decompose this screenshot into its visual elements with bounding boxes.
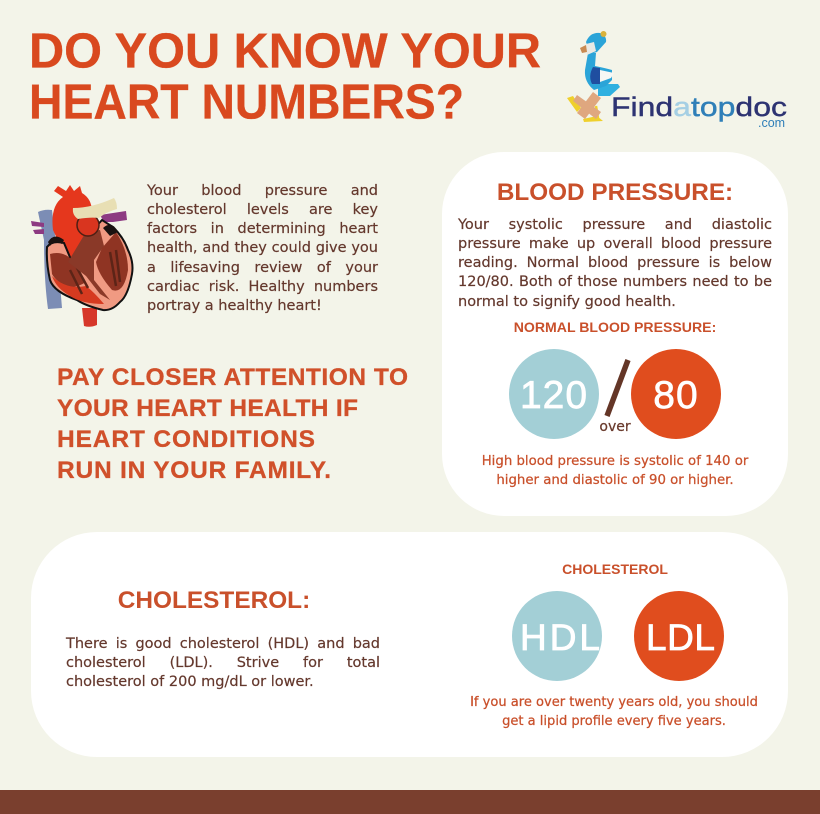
callout: family history	[57, 364, 408, 484]
intro text: factors in determining heart	[147, 221, 378, 237]
intro text: cardiac risk. Healthy numbers	[147, 279, 378, 295]
chart: HDL and LDL	[512, 591, 724, 681]
cholesterol text: cholesterol of 200 mg/dL or lower.	[66, 674, 314, 690]
title	[29, 24, 541, 130]
blood pressure text: reading. Normal blood pressure is below	[458, 255, 772, 271]
title: DO YOU KNOW YOUR	[29, 24, 541, 78]
intro text: portray a healthy heart!	[147, 298, 322, 314]
callout: family history: RUN IN YOUR FAMILY.	[57, 457, 331, 484]
heading: blood pressure: BLOOD PRESSURE:	[497, 179, 733, 206]
note: lipid profile: If you are over twenty years old, you should	[470, 695, 758, 710]
cholesterol text: There is good cholesterol (HDL) and bad	[66, 636, 380, 652]
panel: cholesterol	[31, 532, 788, 757]
logo: Findatopdoc duck	[567, 31, 787, 130]
callout: family history: PAY CLOSER ATTENTION TO	[57, 364, 408, 391]
note: high blood pressure	[482, 454, 748, 488]
callout: family history: YOUR HEART HEALTH IF	[57, 395, 358, 422]
note: lipid profile	[470, 695, 758, 728]
chart: 120 over 80: over	[599, 419, 631, 435]
note: high blood pressure: higher and diastolic of 90 or higher.	[496, 473, 734, 488]
title: HEART NUMBERS?	[29, 76, 464, 130]
blood pressure text	[458, 216, 772, 310]
blood pressure text: Your systolic pressure and diastolic	[458, 216, 772, 232]
label: normal blood pressure: NORMAL BLOOD PRESSURE:	[514, 319, 716, 335]
chart: 120 over 80: 80	[653, 374, 699, 417]
heading: cholesterol: CHOLESTEROL:	[118, 587, 310, 614]
chart: HDL and LDL: LDL	[646, 617, 715, 658]
intro text	[146, 182, 378, 314]
chart: 120 over 80: 120	[520, 374, 588, 417]
icon: heart	[31, 185, 134, 327]
chart: HDL and LDL: HDL	[520, 617, 600, 658]
blood pressure text: pressure make up overall blood pressure	[458, 236, 772, 252]
callout: family history: HEART CONDITIONS	[57, 426, 315, 453]
label: cholesterol: CHOLESTEROL	[562, 561, 668, 577]
note: lipid profile: get a lipid profile every five years.	[502, 714, 726, 728]
blood pressure text: 120/80. Both of those numbers need to be	[458, 274, 772, 290]
footer bar	[0, 790, 820, 814]
chart: 120 over 80	[509, 349, 721, 439]
intro text: Your blood pressure and	[147, 182, 378, 198]
panel: blood pressure	[442, 152, 788, 516]
logo: Findatopdoc duck: .com	[758, 116, 785, 130]
cholesterol text: cholesterol (LDL). Strive for total	[66, 655, 380, 671]
intro text: cholesterol levels are key	[147, 202, 378, 218]
logo: Findatopdoc duck: Find atop doc	[611, 92, 787, 122]
blood pressure text: normal to signify good health.	[458, 294, 676, 310]
intro text: health, and they could give you	[147, 240, 378, 256]
intro text: a lifesaving review of your	[147, 260, 378, 276]
note: high blood pressure: High blood pressure is systolic of 140 or	[482, 454, 748, 469]
cholesterol text	[66, 636, 380, 690]
